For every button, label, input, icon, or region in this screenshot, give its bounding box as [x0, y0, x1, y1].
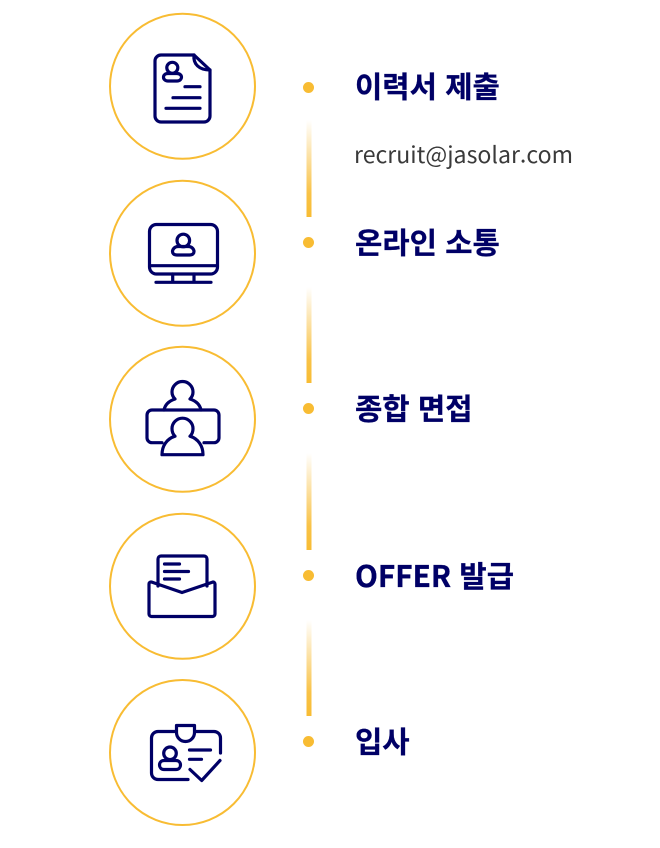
icon: resume document [155, 55, 210, 122]
circle 1 [110, 14, 255, 159]
heading 1: 이력서 제출 [355, 64, 500, 106]
circle 5 [110, 680, 255, 825]
circle 2 [110, 181, 255, 326]
step 5: joining [110, 680, 410, 825]
timeline dot 1 [303, 82, 314, 93]
icon: open envelope [149, 556, 215, 616]
icon: two people interview [147, 382, 219, 455]
heading 3: 종합 면접 [355, 386, 473, 428]
connector 2 [306, 287, 312, 383]
step 1: resume submission [110, 14, 573, 170]
timeline dot 4 [303, 570, 314, 581]
step 2: online communication [110, 181, 500, 326]
connector 3 [306, 453, 312, 550]
step 4: offer issued [110, 514, 514, 659]
email: recruit@jasolar.com [354, 136, 573, 170]
timeline dot 3 [303, 403, 314, 414]
connector 1 [306, 120, 312, 217]
circle 3 [110, 347, 255, 492]
connector 4 [306, 620, 312, 716]
icon: monitor with person [150, 224, 218, 282]
timeline dot 5 [303, 736, 314, 747]
step 3: comprehensive interview [110, 347, 473, 492]
heading 5: 입사 [355, 718, 410, 762]
icon: ID badge with check [152, 726, 220, 780]
timeline dot 2 [303, 237, 314, 248]
heading 2: 온라인 소통 [355, 220, 500, 262]
circle 4 [110, 514, 255, 659]
heading 4: OFFER 발급 [355, 553, 514, 596]
